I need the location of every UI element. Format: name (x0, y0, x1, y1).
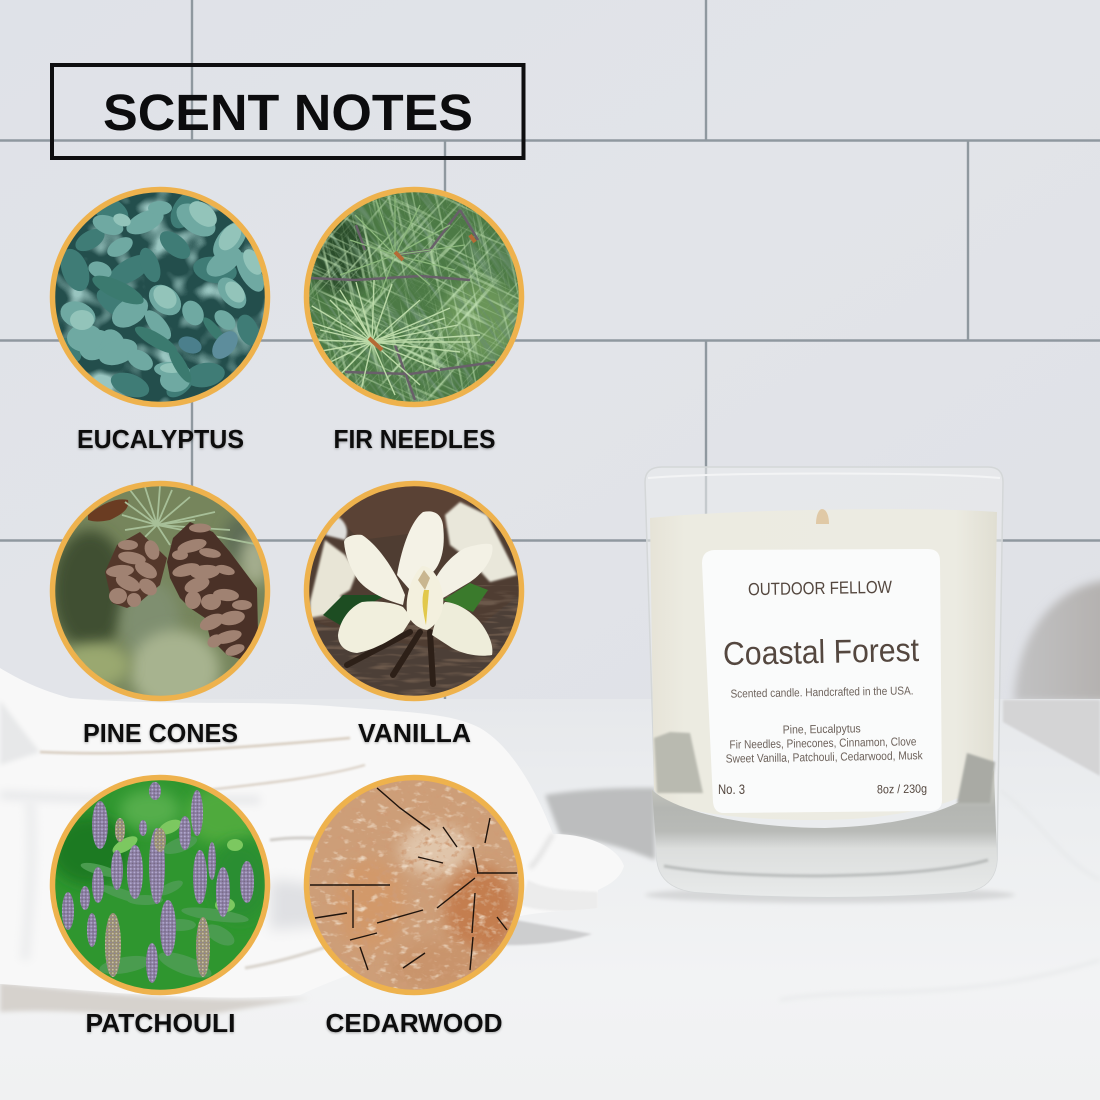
label text: ingredients: Sweet Vanilla, Patchouli, Cedarwood, Musk (726, 748, 923, 766)
label text: ingredients: Pine, Eucalpytus (783, 721, 861, 737)
scent circle: pine cones (50, 481, 270, 710)
title: SCENT NOTES (103, 84, 473, 141)
label: patchouli: PATCHOULI (86, 1008, 236, 1038)
label text: ingredients: Fir Needles, Pinecones, Cinnamon, Clove (729, 734, 917, 752)
label: fir needles: FIR NEEDLES (334, 424, 496, 454)
label text: brand: OUTDOOR FELLOW (748, 577, 893, 599)
label: cedarwood: CEDARWOOD (326, 1008, 502, 1038)
scent circle: cedarwood (305, 775, 525, 995)
towel (0, 668, 624, 1016)
scent circle: fir needles (304, 186, 524, 408)
label: pine cones: PINE CONES (83, 718, 238, 748)
wick (816, 509, 829, 524)
glass jar (645, 467, 1003, 897)
wax (650, 509, 997, 820)
jar rim (648, 474, 1000, 478)
background: wall shadow (1014, 580, 1100, 702)
label (702, 549, 942, 813)
glass base (652, 770, 997, 897)
label: vanilla: VANILLA (358, 718, 471, 748)
label text: candle name: Coastal Forest (723, 631, 919, 672)
background: marble counter (0, 699, 1100, 1100)
scent circle: patchouli (50, 775, 270, 995)
label: eucalyptus: EUCALYPTUS (77, 424, 244, 454)
scent circle: eucalyptus (50, 187, 270, 407)
background: tiled wall (0, 0, 1100, 720)
label text: ingredients (725, 720, 923, 766)
candle (645, 467, 1003, 897)
title box (52, 65, 524, 158)
scent circle: vanilla (305, 481, 525, 705)
label text: number: No. 3 (718, 781, 745, 797)
label text: weight: 8oz / 230g (877, 782, 927, 796)
label text: tagline: Scented candle. Handcrafted in the USA. (730, 685, 914, 701)
